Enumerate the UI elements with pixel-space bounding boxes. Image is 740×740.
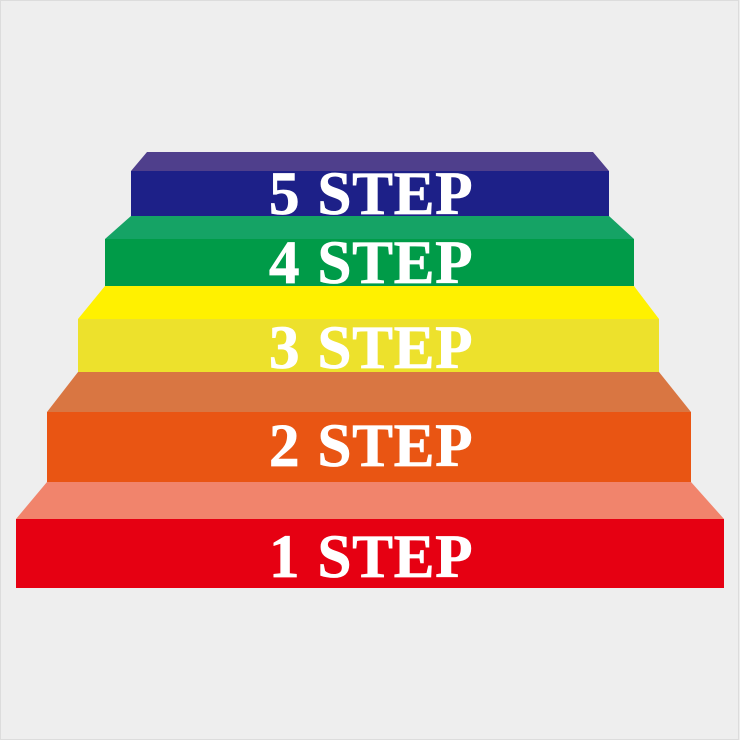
step 4 [105, 216, 634, 297]
step 3 label: STEP [318, 315, 473, 382]
step 4 label: 4 [269, 230, 300, 297]
step 1 label: 1 [269, 524, 300, 591]
step 1 [16, 482, 724, 591]
step 4 label: STEP [318, 230, 473, 297]
step 2 label: 2 [269, 413, 300, 480]
step 5 label: 5 [269, 161, 300, 228]
step 3 label: 3 [269, 315, 300, 382]
step 1 label: STEP [318, 524, 473, 591]
step 5 label: STEP [318, 161, 473, 228]
step 3 [78, 286, 659, 382]
step 5 [131, 152, 609, 228]
step 2 label: STEP [318, 413, 473, 480]
step 2 [47, 372, 691, 482]
